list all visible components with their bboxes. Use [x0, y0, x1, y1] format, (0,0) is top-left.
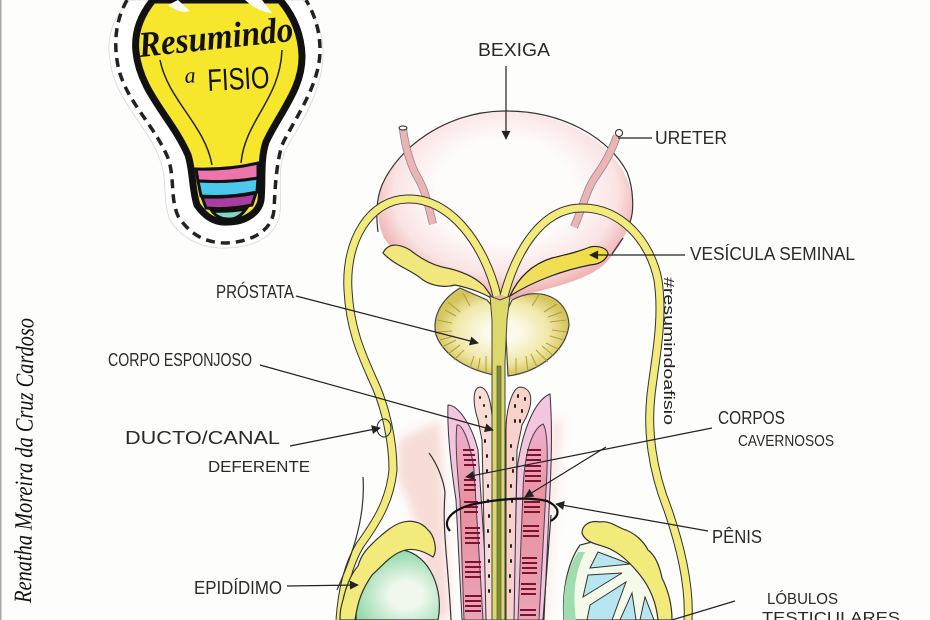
- label: corpos cavernosos: CAVERNOSOS: [738, 433, 834, 450]
- ureter right: [574, 130, 622, 227]
- label: prostata: PRÓSTATA: [216, 281, 294, 302]
- bulb filaments: [160, 50, 282, 165]
- epididymis left: [340, 521, 435, 620]
- label: ureter: URETER: [655, 128, 727, 148]
- label: lobulos testiculares: LÓBULOS: [767, 589, 838, 608]
- label: prostata: [216, 281, 478, 343]
- label: corpo esponjoso: [108, 350, 493, 430]
- vas deferens left: [340, 199, 497, 620]
- label: penis: [556, 504, 762, 547]
- testis left: [340, 521, 439, 620]
- ureter left: [399, 126, 433, 224]
- prostate: [435, 288, 569, 376]
- icon: light bulb sticker: [109, 0, 323, 248]
- label: corpo esponjoso: CORPO ESPONJOSO: [108, 350, 252, 370]
- testicular lobules: [583, 552, 654, 620]
- label: vesicula seminal: VESÍCULA SEMINAL: [690, 244, 855, 264]
- signature: Renatha Moreira da Cruz Cardoso: [10, 318, 39, 604]
- testis right: [564, 522, 672, 620]
- bulb title: a: [184, 62, 196, 88]
- label: epididimo: EPIDÍDIMO: [194, 578, 282, 598]
- bulb title: Resumindo: [136, 9, 295, 65]
- bulb title: FISIO: [207, 60, 270, 98]
- bladder: [377, 111, 633, 302]
- vas deferens right: [504, 208, 688, 620]
- epididymis right: [582, 522, 672, 620]
- soft pink shading around the shaft: [398, 420, 562, 620]
- label: bexiga: BEXIGA: [478, 40, 550, 60]
- bulb highlight: [168, 0, 272, 13]
- label: ureter: [618, 128, 727, 148]
- label: lobulos testiculares: [672, 589, 900, 620]
- label: ducto/canal deferente: [125, 419, 391, 476]
- label: penis: PÊNIS: [712, 527, 762, 547]
- label: corpos cavernosos: CORPOS: [718, 408, 785, 428]
- shaft band arc: [447, 499, 558, 531]
- bulb title: [136, 9, 295, 98]
- label: ducto/canal deferente: DUCTO/CANAL: [125, 428, 280, 448]
- bulb bands: [196, 163, 258, 219]
- seminal vesicle right: [510, 246, 608, 296]
- seminal vesicle left: [383, 245, 494, 300]
- label: corpos cavernosos: [466, 408, 834, 497]
- hashtag: #resumindoafisio: [660, 277, 677, 425]
- corpus spongiosum: [474, 387, 531, 620]
- corpus cavernosum left: [448, 405, 489, 620]
- corpus cavernosum right: [513, 394, 552, 620]
- label: ducto/canal deferente: DEFERENTE: [208, 459, 310, 476]
- shaft outlines: [337, 453, 551, 620]
- label: bexiga: [478, 40, 550, 139]
- urethra: [490, 296, 510, 620]
